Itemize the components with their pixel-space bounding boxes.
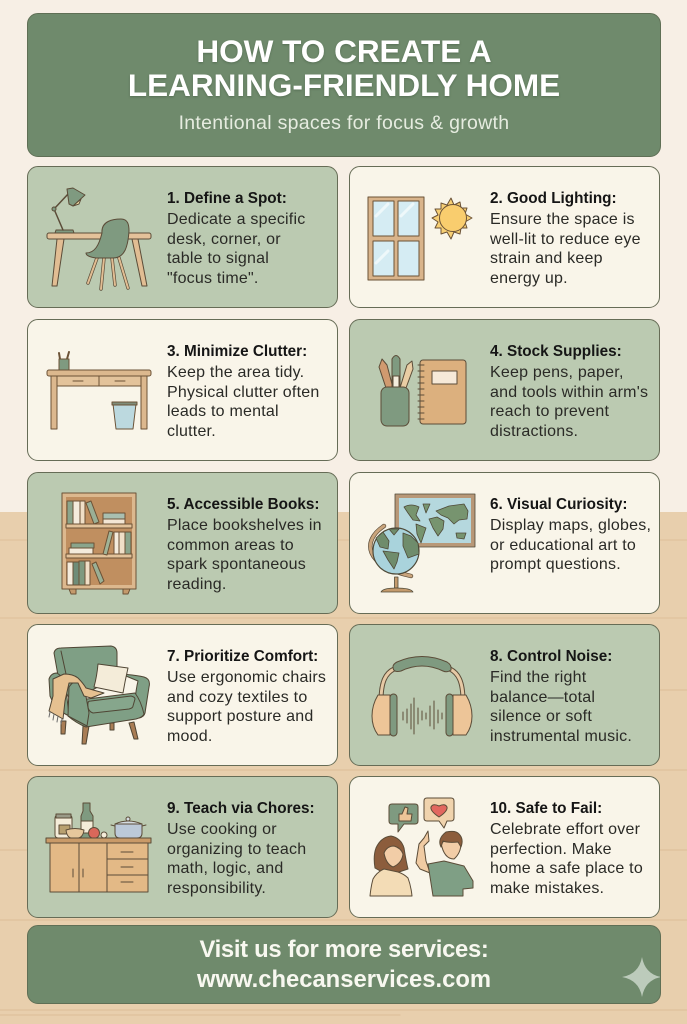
heading: 6. Visual Curiosity: <box>490 496 627 513</box>
icon: pencil cup and notebook <box>378 355 466 426</box>
body text: leads to mental <box>167 403 279 420</box>
panel: 4 stock supplies <box>349 319 660 461</box>
body text <box>167 211 305 286</box>
body text: and cozy textiles to <box>167 688 307 706</box>
call to action text: Visit us for more services: <box>199 936 489 963</box>
icon: tidy desk with bin <box>46 351 152 430</box>
header banner <box>27 13 661 157</box>
body text: make mistakes. <box>490 880 604 896</box>
body text: Physical clutter often <box>167 384 319 400</box>
body text: and tools within arm's <box>490 384 648 400</box>
body text: distractions. <box>490 422 578 440</box>
body text: mood. <box>167 728 213 744</box>
heading: 3. Minimize Clutter: <box>167 343 307 360</box>
body text: home a safe place to <box>490 860 643 877</box>
panel: 2 good lighting <box>349 166 660 308</box>
body text: Use cooking or <box>167 821 277 838</box>
body text: support posture and <box>167 708 314 725</box>
body text: Find the right <box>490 669 586 686</box>
body text: reach to prevent <box>490 403 609 420</box>
body text: instrumental music. <box>490 728 632 744</box>
body text: clutter. <box>167 422 216 440</box>
body text: perfection. Make <box>490 840 612 858</box>
body text <box>167 821 306 896</box>
heading: 7. Prioritize Comfort: <box>167 648 318 665</box>
body text <box>490 517 651 573</box>
body text: balance—total <box>490 688 595 706</box>
body text <box>490 669 632 744</box>
body text: Keep the area tidy. <box>167 364 304 381</box>
body text <box>167 669 326 744</box>
body text <box>167 517 322 592</box>
body text: silence or soft <box>490 708 592 725</box>
body text: Use ergonomic chairs <box>167 669 326 686</box>
icon: window and sun <box>368 196 472 280</box>
body text: Display maps, globes, <box>490 517 651 534</box>
heading: 4. Stock Supplies: <box>490 343 622 360</box>
body text: or educational art to <box>490 536 636 554</box>
panel: 10 safe to fail <box>349 776 660 918</box>
body text: math, logic, and <box>167 860 283 877</box>
body text: reading. <box>167 576 227 592</box>
panel: 7 prioritize comfort <box>27 624 338 766</box>
heading: 2. Good Lighting: <box>490 190 617 207</box>
icon: map and globe <box>368 494 476 592</box>
icon: headphones with sound wave <box>372 656 472 736</box>
heading: 1. Define a Spot: <box>167 190 287 207</box>
title <box>128 33 560 103</box>
footer banner <box>27 925 661 1004</box>
heading: 9. Teach via Chores: <box>167 800 315 817</box>
body text <box>490 211 641 286</box>
call to action text: www.checanservices.com <box>197 966 491 993</box>
panel: 3 minimize clutter <box>27 319 338 461</box>
body text: Celebrate effort over <box>490 821 640 838</box>
panel: 1 define a spot <box>27 166 338 308</box>
heading: 8. Control Noise: <box>490 648 612 665</box>
panel: 9 teach via chores <box>27 776 338 918</box>
body text: table to signal <box>167 250 269 267</box>
icon: sparkle <box>622 957 660 997</box>
call to action text <box>197 936 491 993</box>
body text: common areas to <box>167 536 294 554</box>
body text: desk, corner, or <box>167 230 281 248</box>
body text: strain and keep <box>490 250 603 267</box>
body text: responsibility. <box>167 880 266 896</box>
title: LEARNING-FRIENDLY HOME <box>128 67 560 103</box>
panel: 8 control noise <box>349 624 660 766</box>
body text: Place bookshelves in <box>167 517 322 534</box>
subtitle: Intentional spaces for focus & growth <box>179 112 509 134</box>
icon: kitchen counter <box>46 802 152 892</box>
icon: bookshelf <box>62 492 136 594</box>
body text <box>490 364 648 440</box>
heading: 5. Accessible Books: <box>167 496 319 513</box>
body text: well-lit to reduce eye <box>490 230 641 248</box>
body text: Ensure the space is <box>490 211 635 228</box>
title: HOW TO CREATE A <box>196 33 492 69</box>
icon: desk, lamp and chair <box>46 188 152 291</box>
body text: Dedicate a specific <box>167 211 305 228</box>
body text <box>167 364 319 440</box>
icon: armchair <box>48 646 150 744</box>
heading: 10. Safe to Fail: <box>490 800 602 817</box>
body text <box>490 821 643 896</box>
panel: 6 visual curiosity <box>349 472 660 614</box>
body text: energy up. <box>490 270 568 286</box>
body text: prompt questions. <box>490 556 621 573</box>
icon: two people with speech bubbles <box>370 798 474 896</box>
body text: Keep pens, paper, <box>490 364 624 381</box>
body text: spark spontaneous <box>167 556 306 573</box>
body text: organizing to teach <box>167 840 306 858</box>
panel: 5 accessible books <box>27 472 338 614</box>
wood floor background <box>0 512 687 1024</box>
body text: "focus time". <box>167 270 259 286</box>
